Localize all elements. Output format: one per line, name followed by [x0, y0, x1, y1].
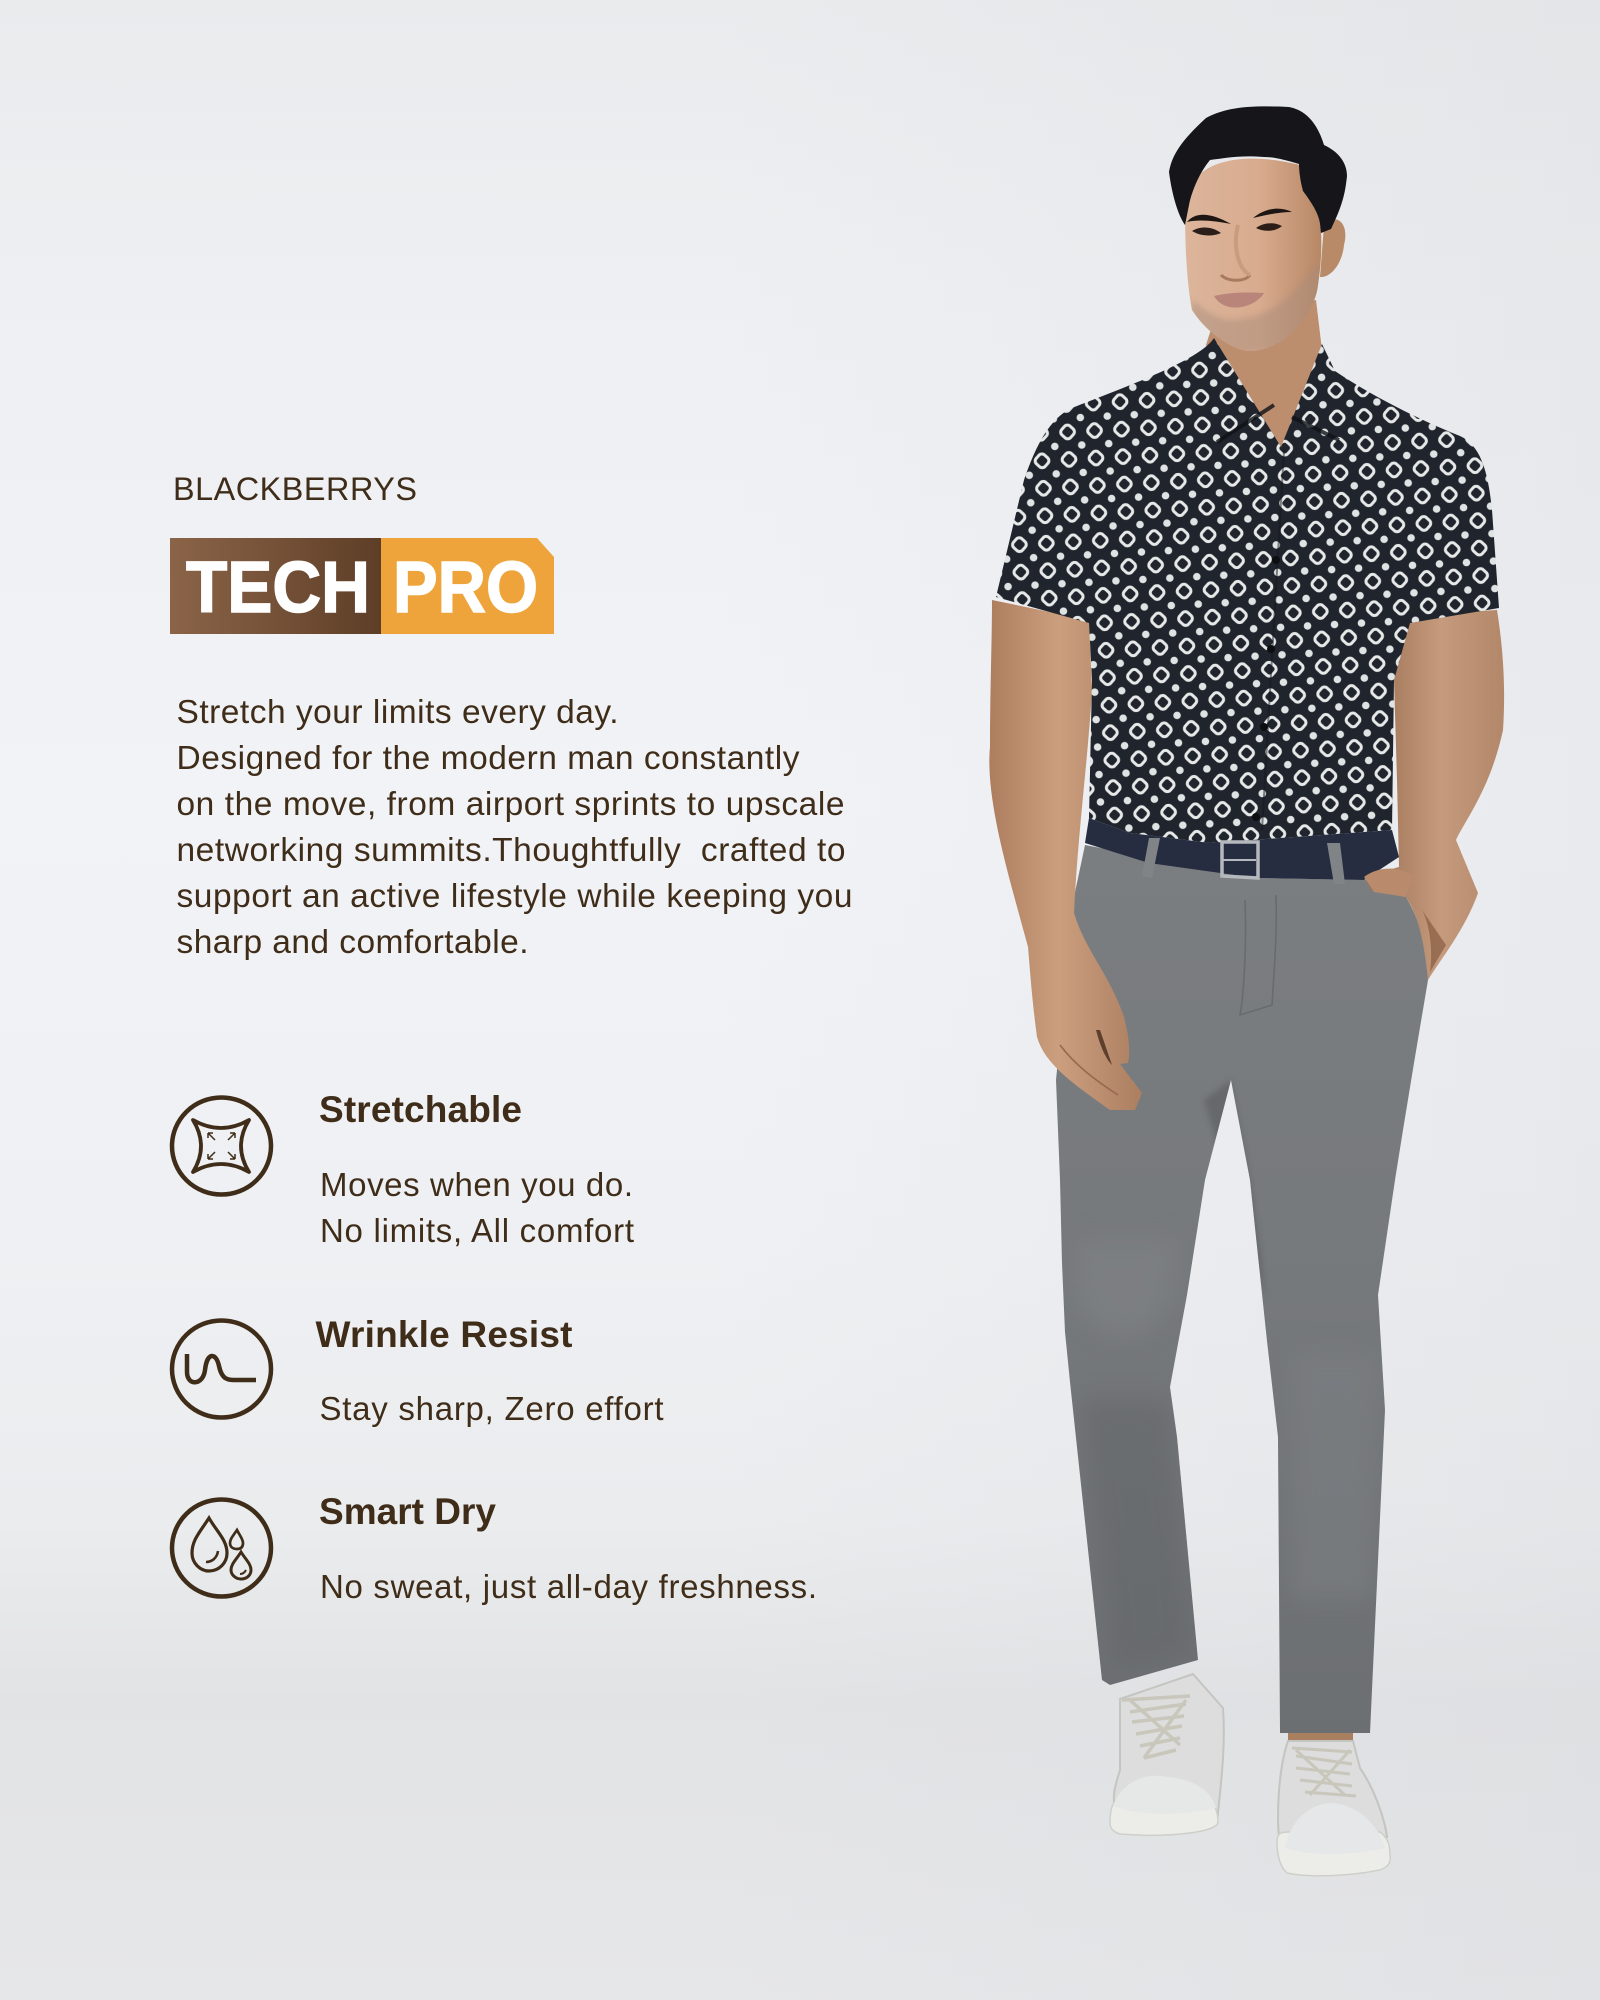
- right arm and hand: [1364, 610, 1504, 980]
- feature: stretchable: [319, 1089, 634, 1249]
- intro paragraph: Designed for the modern man constantly: [176, 740, 800, 777]
- neck: [1206, 300, 1322, 452]
- head: [1169, 106, 1347, 355]
- logo: Tech Pro: PRO: [393, 548, 538, 628]
- icon: smart dry: [172, 1500, 271, 1596]
- logo: Tech Pro: [170, 538, 554, 634]
- logo: Tech Pro: TECH: [186, 548, 370, 628]
- feature: smart dry: No sweat, just all-day freshness.: [320, 1568, 817, 1605]
- icon: stretchable: [172, 1098, 271, 1194]
- feature: stretchable: Stretchable: [319, 1089, 522, 1130]
- left arm and hand: [989, 600, 1142, 1110]
- feature: wrinkle resist: [316, 1314, 664, 1427]
- intro paragraph: [176, 694, 852, 961]
- feature: wrinkle resist: Wrinkle Resist: [316, 1314, 572, 1355]
- intro paragraph: support an active lifestyle while keeping you: [176, 878, 852, 915]
- feature: wrinkle resist: Stay sharp, Zero effort: [320, 1390, 664, 1427]
- model figure: [989, 106, 1504, 1876]
- feature: stretchable: Moves when you do.: [320, 1166, 633, 1203]
- right shoe: [1277, 1733, 1390, 1876]
- belt: [1085, 818, 1399, 884]
- shirt with print: [996, 338, 1499, 843]
- intro paragraph: networking summits.Thoughtfully crafted to: [176, 832, 846, 869]
- feature: smart dry: [319, 1491, 817, 1605]
- feature: smart dry: Smart Dry: [319, 1491, 496, 1532]
- intro paragraph: sharp and comfortable.: [176, 924, 528, 961]
- brand name: BLACKBERRYS: [173, 471, 417, 507]
- right thumb: [1364, 869, 1414, 897]
- intro paragraph: Stretch your limits every day.: [176, 694, 618, 731]
- intro paragraph: on the move, from airport sprints to upscale: [176, 786, 844, 823]
- trousers: [1056, 845, 1428, 1733]
- icon: wrinkle resist: [172, 1320, 271, 1418]
- left shoe: [1110, 1674, 1224, 1835]
- feature: stretchable: No limits, All comfort: [320, 1212, 634, 1249]
